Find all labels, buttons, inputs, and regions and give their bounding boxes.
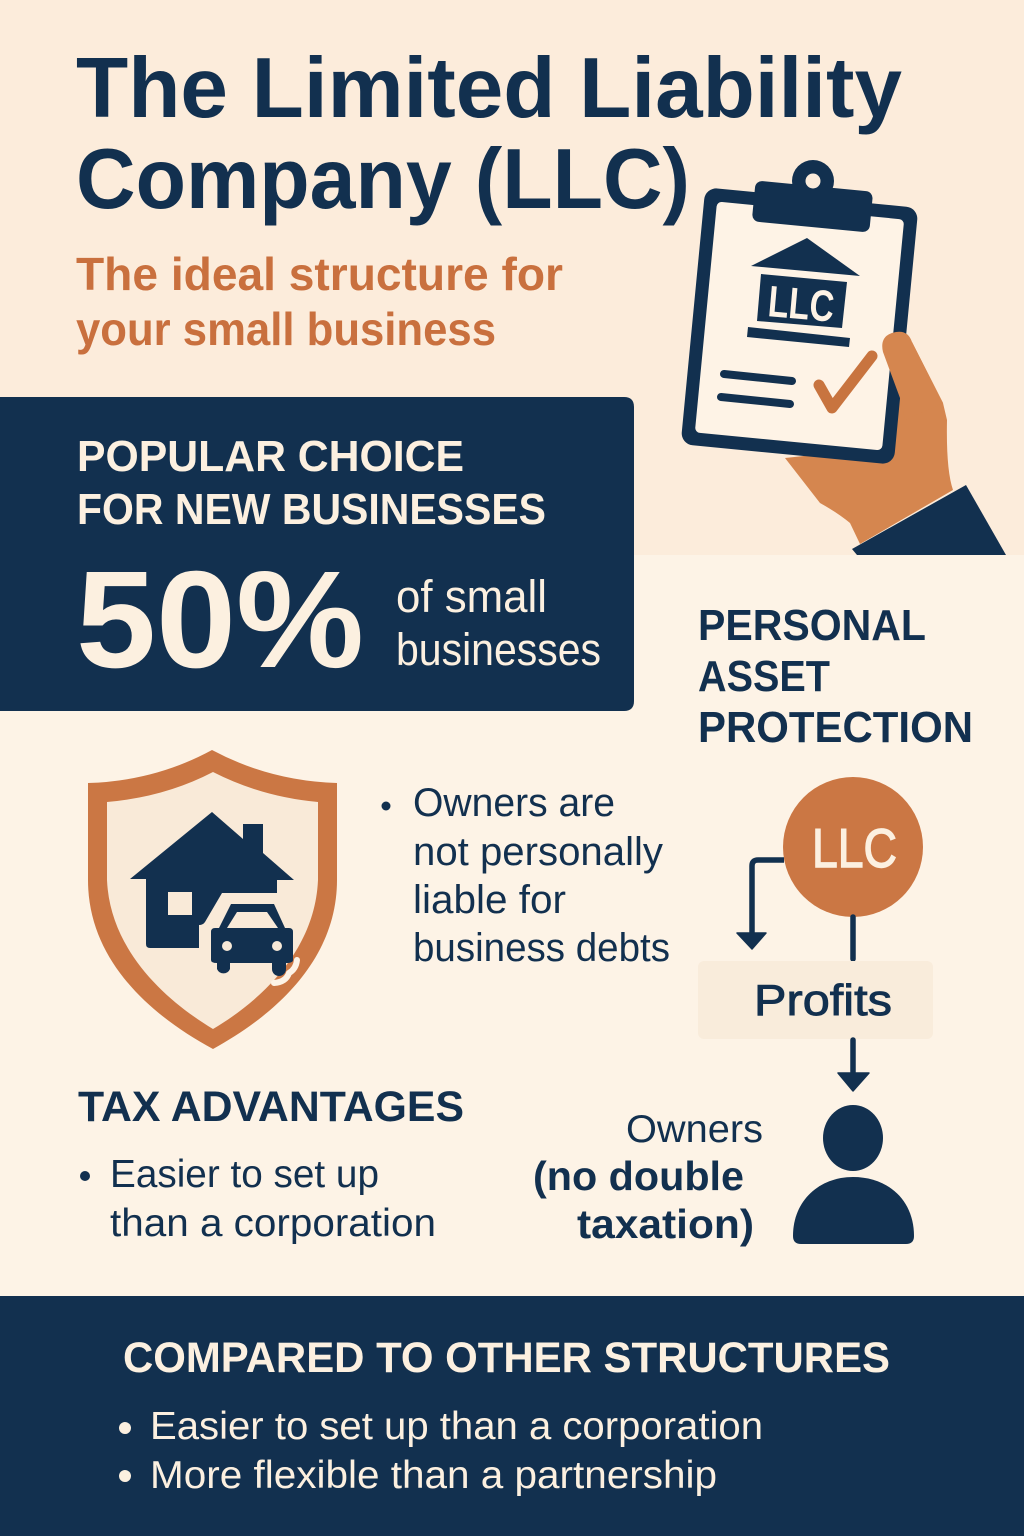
LLC circle: LLC (812, 817, 897, 879)
figure caption: of small (396, 571, 547, 622)
icon: hand holding LLC clipboard (681, 160, 1006, 555)
flow diagram: LLC to profits to owners (698, 777, 933, 1244)
profits box (698, 961, 933, 1039)
section: tax advantages (78, 1083, 464, 1245)
heading: personal asset protection: PROTECTION (698, 703, 973, 752)
LLC building emblem (747, 238, 860, 347)
text: owners no double taxation: taxation) (577, 1201, 754, 1247)
clipboard frame (681, 187, 918, 465)
footer panel: compared to other structures (0, 1296, 1024, 1536)
text: owners no double taxation (533, 1108, 763, 1247)
shield (88, 750, 337, 1049)
heading: personal asset protection: ASSET (698, 652, 830, 701)
LLC circle (783, 777, 923, 917)
heading: TAX ADVANTAGES (78, 1083, 464, 1131)
title: Company (LLC) (76, 132, 690, 227)
title: The Limited Liability (76, 41, 902, 136)
text: liability bullet (382, 781, 670, 970)
panel: popular choice statistic (0, 397, 634, 711)
footer bullets: Easier to set up than a corporation (150, 1405, 763, 1448)
panel heading: POPULAR CHOICE (77, 432, 464, 481)
text: owners no double taxation: (no double (533, 1153, 744, 1199)
panel heading: FOR NEW BUSINESSES (77, 485, 546, 534)
subtitle: your small business (76, 303, 496, 355)
thumb (882, 332, 943, 420)
arrow: profits to owners (838, 1040, 869, 1091)
house (130, 812, 294, 948)
footer heading: COMPARED TO OTHER STRUCTURES (123, 1334, 890, 1382)
clipboard clip (752, 160, 873, 233)
sleeve (852, 485, 1006, 555)
icon: owner person (793, 1105, 914, 1244)
heading: personal asset protection (698, 601, 973, 752)
text: liability bullet: Owners are (413, 781, 615, 825)
footer bullets: More flexible than a partnership (150, 1454, 717, 1497)
50% figure: 50% (76, 543, 364, 697)
panel heading (77, 432, 546, 534)
check mark (819, 356, 872, 408)
document lines (721, 374, 792, 404)
arrow: LLC left branch (737, 860, 784, 949)
LLC building emblem: LLC (766, 277, 836, 332)
bullet text: than a corporation (110, 1202, 436, 1245)
text: liability bullet: business debts (413, 926, 670, 970)
figure caption: businesses (396, 624, 601, 675)
connector: LLC to profits (850, 917, 856, 959)
bullet text (80, 1153, 436, 1245)
car (211, 904, 293, 976)
hand (785, 342, 953, 544)
profits box: Profits (754, 976, 892, 1025)
footer bullets (119, 1405, 763, 1497)
figure caption (396, 571, 601, 675)
subtitle: The ideal structure for (76, 248, 563, 300)
text: owners no double taxation: Owners (626, 1108, 763, 1151)
heading: personal asset protection: PERSONAL (698, 601, 926, 650)
title (76, 41, 902, 227)
icon: shield with house and car (88, 750, 337, 1049)
subtitle (76, 248, 563, 355)
text: liability bullet: liable for (413, 878, 566, 922)
bullet text: Easier to set up (110, 1153, 379, 1196)
text: liability bullet: not personally (413, 830, 663, 874)
header: title and subtitle (76, 41, 902, 355)
